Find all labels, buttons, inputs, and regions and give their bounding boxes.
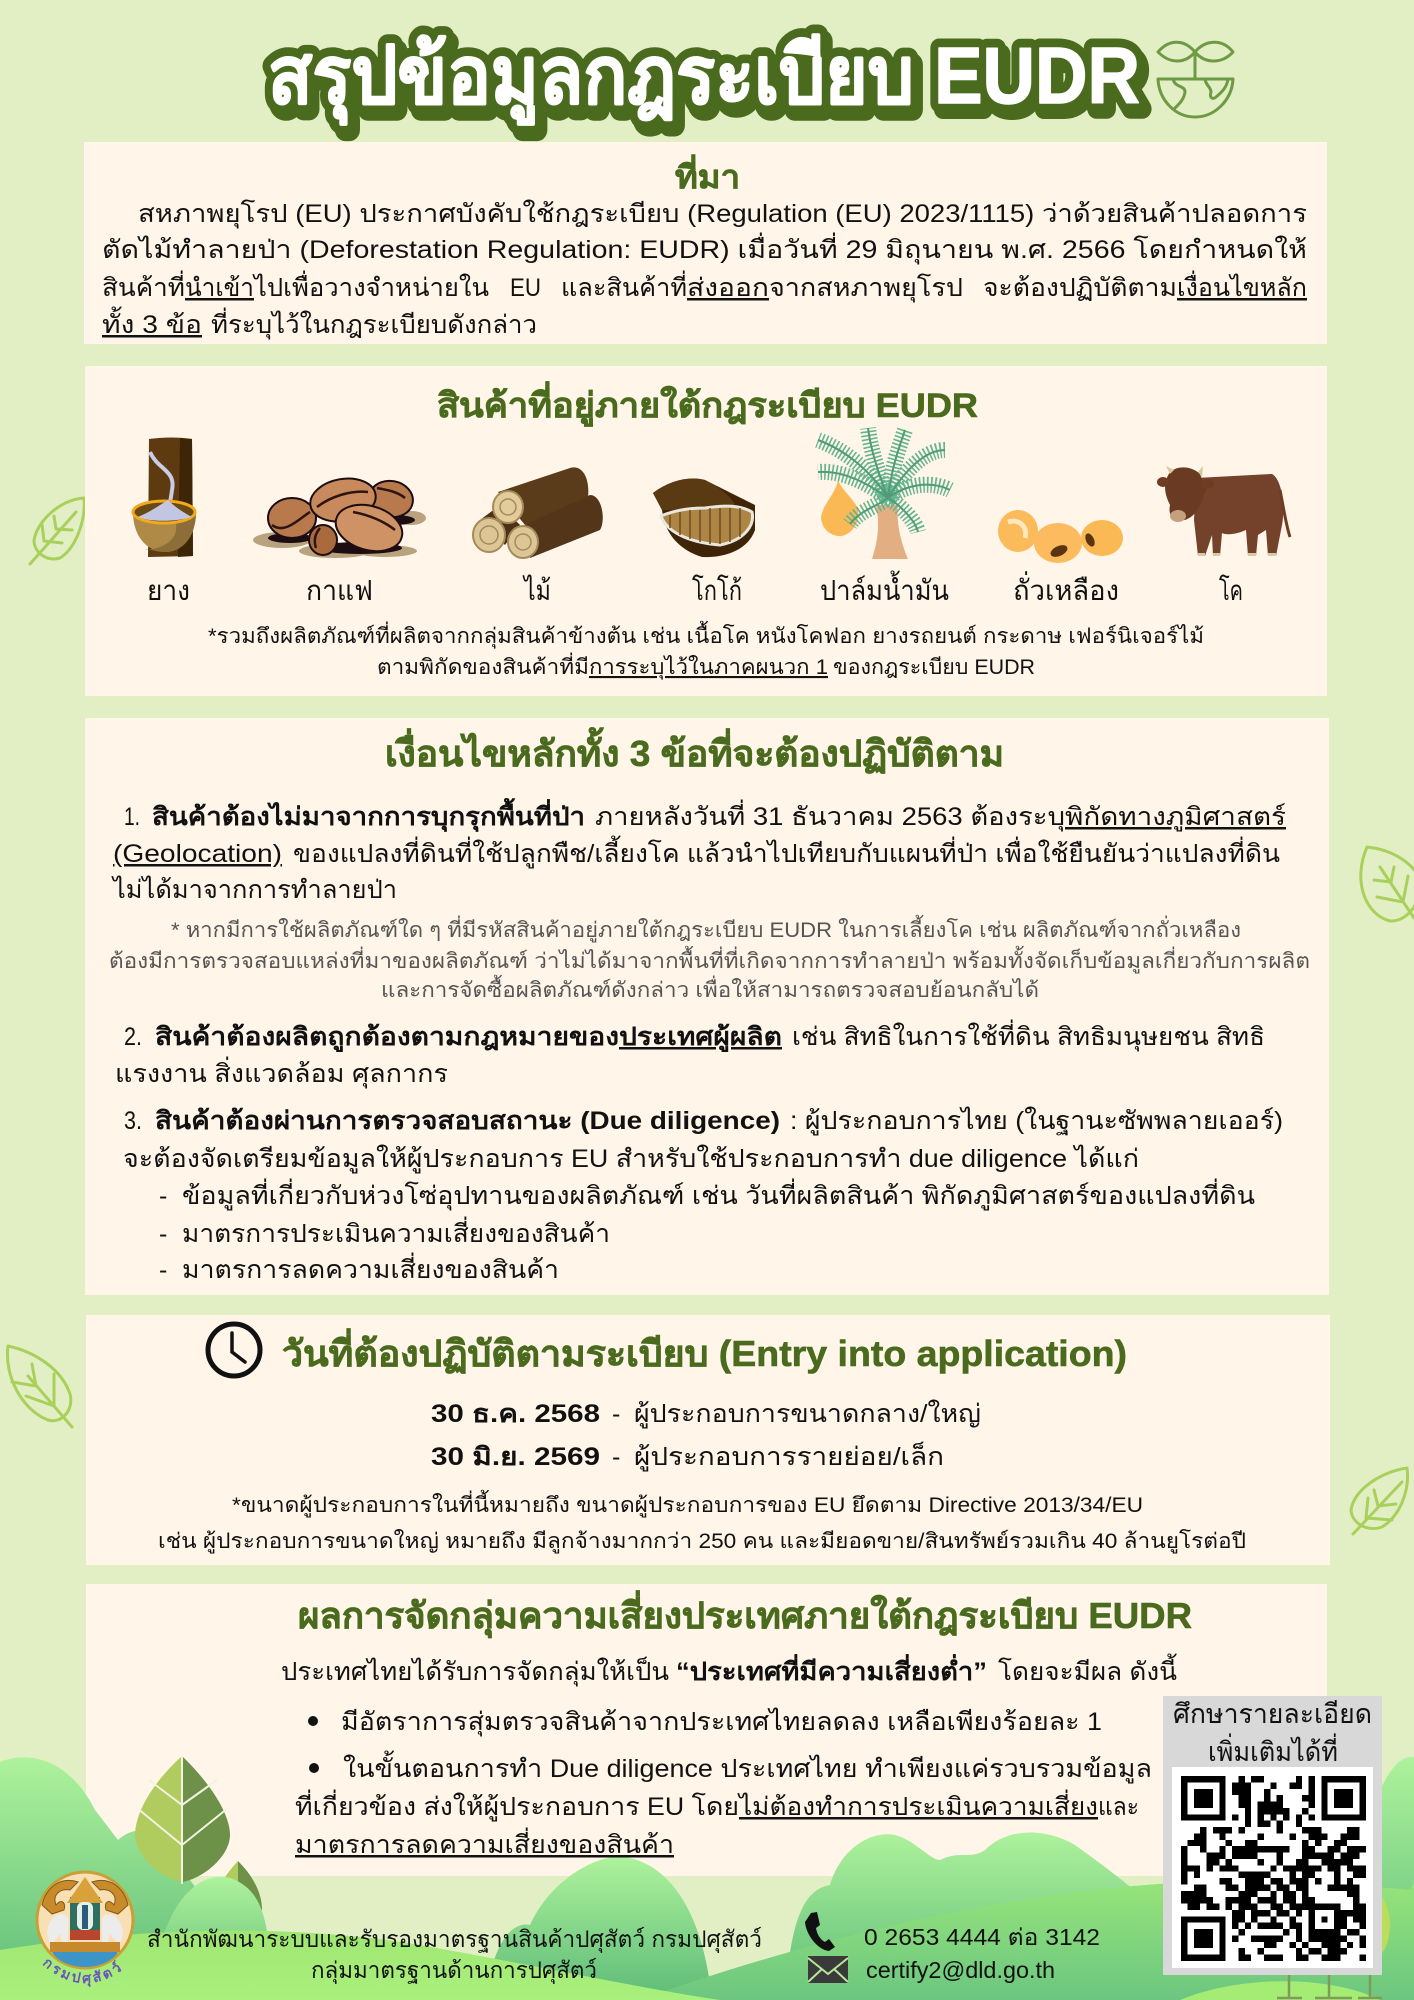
risk intro: ประเทศไทยได้รับการจัดกลุ่มให้เป็น (281, 1656, 669, 1687)
condition 2: แรงงาน สิ่งแวดล้อม ศุลกากร (115, 1056, 448, 1089)
illustrated hills background (0, 1757, 1414, 2000)
panel: source background (84, 142, 1327, 344)
footer: department name: สำนักพัฒนาระบบและรับรองมาตรฐานสินค้าปศุสัตว์ กรมปศุสัตว์ (147, 1926, 762, 1953)
date lines (431, 1399, 981, 1472)
condition 3: : ผู้ประกอบการไทย (ในฐานะซัพพลายเออร์) (790, 1106, 1283, 1136)
source paragraph: สินค้าที่ (102, 270, 185, 302)
condition 1: ของแปลงที่ดินที่ใช้ปลูกพืช/เลี้ยงโค แล้วนำไปเทียบกับแผนที่ป่า เพื่อใช้ยืนยันว่าแปลงที่ดิน (293, 835, 1280, 869)
icon: sprout globe (1158, 42, 1233, 117)
QR caption: ศึกษารายละเอียด (1173, 1699, 1372, 1729)
labels: commodity names: โกโก้ (692, 574, 742, 606)
condition 3: สินค้าต้องผ่านการตรวจสอบสถานะ (Due diligence) (155, 1107, 780, 1135)
date lines: - (612, 1400, 620, 1428)
heading: application dates: วันที่ต้องปฏิบัติตามระเบียบ (Entry into application) (282, 1328, 1127, 1374)
condition 1 (111, 797, 1286, 904)
condition 2: สินค้าต้องผลิตถูกต้องตามกฎหมายของ (155, 1023, 619, 1053)
footer: email: certify2@dld.go.th (866, 1957, 1055, 1983)
conditions section (109, 727, 1310, 1284)
logo: department seal (36, 1870, 134, 1987)
condition 1 footnote: ต้องมีการตรวจสอบแหล่งที่มาของผลิตภัณฑ์ ว่าไม่ได้มาจากพื้นที่ที่เกิดจากการทำลายป่า พร้อมทั้งจัดเก็บข้อมูลเกี่ยวกับการผลิต (109, 946, 1310, 974)
date lines: - (612, 1443, 620, 1471)
condition 1: ไม่ได้มาจากการทำลายป่า (111, 875, 397, 904)
risk result section (281, 1590, 1192, 1859)
commodities footnote: *รวมถึงผลิตภัณฑ์ที่ผลิตจากกลุ่มสินค้าข้างต้น เช่น เนื้อโค หนังโคฟอก ยางรถยนต์ กระดาษ เฟอร์นิเจอร์ไม้ (208, 621, 1204, 649)
risk bullets: ที่เกี่ยวข้อง ส่งให้ผู้ประกอบการ EU โดย (295, 1789, 739, 1822)
logo: department seal: กรมปศุสัตว์ (42, 1960, 122, 1987)
icon: wood logs (473, 467, 603, 558)
heading: source: ที่มา (675, 154, 740, 195)
condition 1: 1. (124, 803, 140, 831)
panel: risk result background (86, 1584, 1327, 1876)
labels: commodity names: ไม้ (522, 575, 551, 606)
risk intro: “ประเทศที่มีความเสี่ยงต่ำ” (676, 1654, 987, 1686)
risk bullets (295, 1707, 1152, 1859)
labels: commodity names (147, 570, 1243, 606)
decorative leaf: right lower (1351, 1468, 1408, 1534)
source paragraph: ไปเพื่อวางจำหน่ายใน (252, 270, 489, 302)
icon: cocoa pod (653, 479, 755, 557)
source paragraph (102, 199, 1307, 340)
condition 3: มาตรการลดความเสี่ยงของสินค้า (182, 1252, 559, 1284)
date lines: ผู้ประกอบการรายย่อย/เล็ก (634, 1441, 944, 1472)
condition 1: (Geolocation) (113, 840, 282, 868)
decorative leaf: left upper (30, 498, 84, 564)
heading: conditions: เงื่อนไขหลักทั้ง 3 ข้อที่จะต้องปฏิบัติตาม (385, 727, 1004, 774)
source paragraph: นำเข้า (185, 274, 254, 302)
condition 2: 2. (124, 1023, 142, 1051)
condition 3: - (159, 1256, 167, 1284)
risk intro: โดยจะมีผล ดังนี้ (998, 1653, 1177, 1686)
risk bullets: มาตรการลดความเสี่ยงของสินค้า (295, 1827, 674, 1859)
date lines: 30 มิ.ย. 2569 (431, 1443, 600, 1471)
source paragraph: จะต้องปฏิบัติตาม (983, 274, 1177, 302)
condition 2: เช่น สิทธิในการใช้ที่ดิน สิทธิมนุษยชน สิทธิ (792, 1019, 1265, 1052)
source paragraph: ตัดไม้ทำลายป่า (Deforestation Regulation: EUDR) เมื่อวันที่ 29 มิถุนายน พ.ศ. 2566 โดยกำหนดให้ (102, 232, 1307, 265)
icon: clock (208, 1324, 260, 1376)
icon: cow (1157, 466, 1290, 556)
labels: commodity names: โค (1219, 574, 1243, 606)
risk bullets: มีอัตราการสุ่มตรวจสินค้าจากประเทศไทยลดลง เหลือเพียงร้อยละ 1 (341, 1707, 1102, 1737)
icon: phone (805, 1912, 835, 1951)
source paragraph: ที่ระบุไว้ในกฎระเบียบดังกล่าว (211, 307, 537, 340)
source paragraph: เงื่อนไขหลัก (1177, 270, 1307, 302)
condition 1 footnote: และการจัดซื้อผลิตภัณฑ์ดังกล่าว เพื่อให้สามารถตรวจสอบย้อนกลับได้ (381, 975, 1039, 1002)
commodities section (133, 381, 1290, 680)
condition 1 footnote (109, 915, 1310, 1002)
decorative leaf: left lower (7, 1346, 72, 1427)
source paragraph: จากสหภาพยุโรป (769, 273, 963, 303)
footer: department name (147, 1926, 762, 1984)
icon: mail (808, 1956, 848, 1983)
title: สรุปข้อมูลกฎระเบียบ EUDR (268, 31, 1140, 126)
dates footnote (158, 1490, 1246, 1554)
labels: commodity names: ปาล์มน้ำมัน (820, 570, 949, 606)
icon: coffee beans (253, 474, 426, 559)
decorative leaf: right upper (1361, 847, 1414, 921)
title: สรุปข้อมูลกฎระเบียบ EUDR (268, 31, 1140, 126)
condition 1 footnote: * หากมีการใช้ผลิตภัณฑ์ใด ๆ ที่มีรหัสสินค้าอยู่ภายใต้กฎระเบียบ EUDR ในการเลี้ยงโค เช่น ผลิตภัณฑ์จากถั่วเหลือง (171, 915, 1241, 943)
QR caption (1173, 1699, 1372, 1767)
condition 3: ข้อมูลที่เกี่ยวกับห่วงโซ่อุปทานของผลิตภัณฑ์ เช่น วันที่ผลิตสินค้า พิกัดภูมิศาสตร์ของแปลงที่ดิน (182, 1178, 1255, 1211)
footer: phone number: 0 2653 4444 ต่อ 3142 (864, 1924, 1100, 1950)
condition 1: ภายหลังวันที่ 31 ธันวาคม 2563 ต้องระบุ (595, 799, 1065, 832)
footer: department name: กลุ่มมาตรฐานด้านการปศุสัตว์ (311, 1957, 597, 1984)
risk bullets: ไม่ต้องทำการประเมินความเสี่ยง (737, 1789, 1098, 1821)
condition 3: มาตรการประเมินความเสี่ยงของสินค้า (182, 1216, 610, 1248)
condition 3 (123, 1106, 1283, 1284)
commodities footnote: การระบุไว้ในภาคผนวก 1 (589, 655, 828, 680)
condition 2: ประเทศผู้ผลิต (619, 1023, 782, 1053)
title: สรุปข้อมูลกฎระเบียบ EUDR (272, 37, 1144, 132)
tree leaf illustration small (215, 1861, 262, 1910)
condition 3: - (159, 1182, 167, 1210)
panel: commodities background (85, 366, 1327, 696)
tree leaf illustration large (135, 1756, 230, 1884)
icon: soybeans (998, 510, 1123, 563)
icon: oil palm (818, 428, 950, 559)
condition 1: สินค้าต้องไม่มาจากการบุกรุกพื้นที่ป่า (152, 797, 585, 833)
dates footnote: *ขนาดผู้ประกอบการในที่นี้หมายถึง ขนาดผู้ประกอบการของ EU ยึดตาม Directive 2013/34/EU (232, 1490, 1143, 1518)
condition 2 (115, 1019, 1265, 1089)
QR panel (1163, 1696, 1382, 1975)
heading: risk result: ผลการจัดกลุ่มความเสี่ยงประเทศภายใต้กฎระเบียบ EUDR (298, 1590, 1192, 1639)
dates section (158, 1324, 1246, 1554)
labels: commodity names: กาแฟ (306, 575, 373, 606)
source paragraph: ส่งออก (687, 274, 769, 302)
date lines: 30 ธ.ค. 2568 (431, 1400, 600, 1428)
condition 1: พิกัดทางภูมิศาสตร์ (1065, 803, 1286, 832)
risk bullets: และ (1098, 1793, 1139, 1821)
source paragraph: EU (510, 274, 541, 302)
risk intro (281, 1653, 1177, 1687)
risk bullets: ในขั้นตอนการทำ Due diligence ประเทศไทย ทำเพียงแค่รวบรวมข้อมูล (343, 1750, 1152, 1784)
condition 3: จะต้องจัดเตรียมข้อมูลให้ผู้ประกอบการ EU สำหรับใช้ประกอบการทำ due diligence ได้แก่ (123, 1144, 1139, 1174)
labels: commodity names: ถั่วเหลือง (1013, 571, 1119, 606)
heading: commodities: สินค้าที่อยู่ภายใต้กฎระเบียบ EUDR (437, 381, 978, 427)
labels: commodity names: ยาง (147, 575, 190, 606)
date lines: ผู้ประกอบการขนาดกลาง/ใหญ่ (634, 1399, 981, 1429)
source paragraph: ทั้ง 3 ข้อ (102, 306, 202, 339)
condition 3: - (159, 1220, 167, 1248)
icon: rubber (133, 438, 196, 557)
QR caption: เพิ่มเติมได้ที่ (1208, 1733, 1338, 1767)
source paragraph: สหภาพยุโรป (EU) ประกาศบังคับใช้กฎระเบียบ (Regulation (EU) 2023/1115) ว่าด้วยสินค้าปลอดการ (138, 199, 1307, 229)
QR code (1181, 1776, 1366, 1961)
source paragraph: และสินค้าที่ (561, 270, 687, 302)
commodities footnote: ตามพิกัดของสินค้าที่มี (377, 652, 589, 679)
commodities footnote (208, 621, 1204, 680)
hill covering small leaf (150, 1877, 272, 2000)
dates footnote: เช่น ผู้ประกอบการขนาดใหญ่ หมายถึง มีลูกจ้างมากกว่า 250 คน และมียอดขาย/สินทรัพย์รวมเกิน 40 ล้านยูโรต่อปี (158, 1529, 1246, 1554)
commodities footnote: ของกฎระเบียบ EUDR (833, 656, 1035, 679)
condition 3: 3. (124, 1107, 142, 1135)
source section (102, 154, 1307, 340)
panel: conditions background (85, 718, 1329, 1295)
ground left (0, 1931, 720, 2000)
panel: dates background (86, 1315, 1330, 1565)
